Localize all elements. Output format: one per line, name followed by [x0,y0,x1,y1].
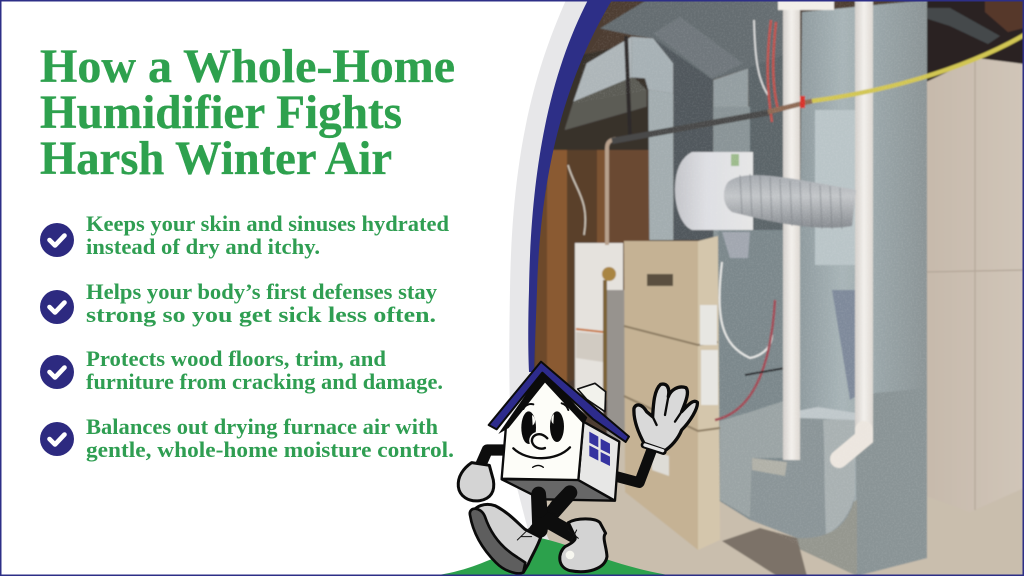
bypass plate and filter [722,232,750,258]
chimney gable [578,383,606,412]
white pipe left [783,0,800,460]
bullet 1 text: instead of dry and itchy. [86,234,320,259]
drywall panel on right [926,58,1024,512]
boot laces [517,528,578,540]
boot highlight [566,551,574,559]
grey column beside furnace [607,290,625,440]
check icon 4 [40,422,74,456]
upper-left duct group, drawn in crop coordinates [565,0,787,240]
curved navy accent band [528,0,620,372]
trap side face [823,417,855,534]
right glove [634,384,697,452]
bullet 2 text: strong so you get sick less often. [86,302,436,327]
duct trap elbow [750,418,826,538]
back room wood wall [568,150,596,382]
black wire [745,368,785,375]
window [589,432,610,466]
bullet 2 [40,279,438,327]
arch light face [632,37,673,93]
title [40,40,455,185]
floor [546,439,1022,574]
yellow gas hose [812,34,1024,101]
lower duct light panel [720,400,787,518]
trap ledge [752,458,787,476]
white thin wire top [754,20,768,95]
wood panel far left [535,190,547,380]
diagonal duct face [653,17,743,78]
glove finger lines [653,397,682,425]
wood panel right of stud [609,150,649,245]
eyebrows [523,403,568,410]
bullet 3 [40,346,443,394]
bullet 4 [40,414,454,462]
right arm [601,450,652,483]
bullet 1 [40,211,449,259]
front leg [539,494,573,535]
white cable on wall [568,165,585,235]
arch dark shade [653,38,713,240]
lower block [713,107,750,240]
water heater orange stripe [576,329,603,332]
front boot sole [470,509,525,573]
furnace plate [647,274,673,286]
bullet 1 text: Keeps your skin and sinuses hydrated [86,211,449,236]
dark gas pipe [612,112,772,141]
roof [489,362,629,442]
hanger strap [626,36,630,135]
plenum blue shadow [832,290,858,400]
right eye [550,411,564,442]
humidifier body [675,152,753,230]
title line 2: Humidifier Fights [40,86,402,139]
humidifier label [731,154,739,166]
glove cuff fill [645,445,663,451]
plenum reflection [815,110,855,265]
check icon 2 [40,290,74,324]
white wire loop [719,262,772,358]
left glove [458,463,494,501]
right block dark [748,56,783,230]
back leg [537,493,570,531]
wall sticker below arm [652,450,669,476]
left arm [480,450,503,467]
window panes [589,432,610,466]
photo backdrop [534,2,922,434]
water heater [575,243,623,420]
red wire [715,300,775,420]
title line 3: Harsh Winter Air [40,132,392,185]
red wires top [768,20,778,122]
front boot [471,504,541,572]
wood stud centre [596,149,605,243]
dark ceiling behind duct [554,49,649,150]
wood stud left [547,150,567,385]
back boot [560,519,607,572]
bullet 3 text: furniture from cracking and damage. [86,369,443,394]
leg tops over underside [539,493,570,510]
bullet 2 text: Helps your body’s first defenses stay [86,279,438,304]
white pipe elbow [839,430,864,459]
ceiling, top right [927,2,1022,81]
furnace front [624,241,698,550]
smile [513,447,570,458]
face [513,403,570,467]
furnace panel seams [624,326,720,431]
bullet 4 text: gentle, whole-home moisture control. [86,437,454,462]
plenum base concrete [797,500,857,576]
top pipe fitting [778,0,834,10]
title line 1: How a Whole-Home [40,40,455,93]
furnace side [698,236,720,550]
copper pipe [607,139,616,245]
vertical duct light face [648,90,673,240]
nose [532,434,547,449]
curved grey accent band [509,0,640,576]
house underside [502,479,614,501]
duct behind furnace [718,230,788,520]
galvanised speckle texture [570,0,930,576]
bullet 3 text: Protects wood floors, trim, and [86,346,386,371]
left duct light face [573,37,632,102]
eye highlights [532,414,554,425]
main plenum [800,2,928,502]
right block light face [712,68,750,108]
top duct panel [600,2,783,80]
drywall seam [926,60,1024,510]
white pipe right [855,0,873,430]
ceiling joists [985,0,1024,32]
floor shadow under furnace [722,528,807,576]
brass valve [602,267,616,281]
flex duct ribs [740,174,842,229]
underside of left duct [565,77,647,130]
furnace labels [700,305,718,405]
side wall [578,422,619,501]
flexible silver duct [724,175,856,228]
check icon 1 [40,223,74,257]
green hill [438,538,668,575]
trap top face [797,407,856,420]
chin [533,465,543,467]
glove cuff [644,445,663,452]
red valve [800,96,805,108]
left eye [521,411,536,444]
nose line [532,434,547,449]
basement furnace photo [530,0,1024,576]
roof underside shadow [498,371,587,434]
bullet 4 text: Balances out drying furnace air with [86,414,438,439]
brass valve fitting [768,101,812,112]
brass pipe [603,280,607,400]
front wall [502,373,584,480]
mascot: walking house [458,362,697,573]
overhead dark duct [927,8,1000,44]
water heater label [576,332,603,362]
check icon 3 [40,355,74,389]
plenum darker lower panel [856,392,906,574]
